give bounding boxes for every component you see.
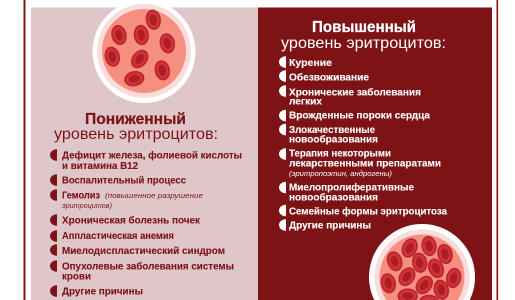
- list: causes of low level: Дефицит железа, фолиевой кислоты: [62, 150, 242, 162]
- heading: low level: Пониженный: [85, 111, 186, 128]
- list: causes of high level: Семейные формы эритроцитоза: [289, 206, 447, 218]
- list: causes of high level: Другие причины: [289, 220, 371, 232]
- list: causes of low level: Миелодиспластический синдром: [62, 246, 225, 257]
- list: causes of high level: Терапия некоторыми: [289, 148, 391, 160]
- list: causes of high level: новообразования: [289, 134, 378, 146]
- list: causes of high level: легких: [289, 96, 322, 108]
- list: causes of high level: Злокачественные: [289, 125, 375, 136]
- list: causes of high level: Обезвоживание: [289, 72, 369, 84]
- list: causes of low level: и витамина В12: [62, 161, 138, 172]
- list: causes of high level: новообразования: [289, 192, 378, 204]
- list: causes of low level: Опухолевые заболевания системы: [62, 260, 234, 272]
- list: causes of low level: эритроцитов): [62, 201, 112, 210]
- list: causes of low level: крови: [62, 272, 91, 282]
- list: causes of high level: [279, 56, 447, 232]
- list: causes of low level: Гемолиз: [62, 190, 100, 202]
- panel: high erythrocytes: [258, 8, 492, 300]
- icon: blood sample with few cells: [92, 0, 196, 103]
- heading: low level: уровень эритроцитов:: [54, 126, 218, 143]
- list: causes of high level: Миелопролиферативные: [289, 182, 414, 194]
- list: causes of low level: [50, 149, 242, 298]
- left vertical line: [24, 0, 26, 300]
- list: causes of high level: Врожденные пороки сердца: [289, 110, 430, 122]
- list: causes of high level: Хронические заболевания: [289, 86, 421, 98]
- list: causes of high level: (эритропоэтин, андрогены): [289, 169, 393, 178]
- heading: low level: [54, 111, 218, 143]
- list: causes of low level: Аппластическая анемия: [62, 231, 174, 242]
- icon: blood sample with many cells: [369, 224, 475, 300]
- list: causes of low level: Хроническая болезнь почек: [62, 214, 201, 226]
- panel: low erythrocytes: [31, 0, 258, 300]
- list: causes of low level: (повышенное разрушение: [105, 191, 203, 200]
- list: causes of low level: Другие причины: [62, 286, 143, 298]
- list: causes of high level: Курение: [289, 58, 332, 69]
- list: causes of low level: Воспалительный процесс: [62, 176, 186, 186]
- heading: high level: [281, 19, 446, 52]
- list: causes of high level: лекарственными препаратами: [289, 158, 441, 170]
- heading: high level: Повышенный: [312, 19, 416, 36]
- heading: high level: уровень эритроцитов:: [281, 35, 446, 52]
- right vertical line: [496, 0, 498, 300]
